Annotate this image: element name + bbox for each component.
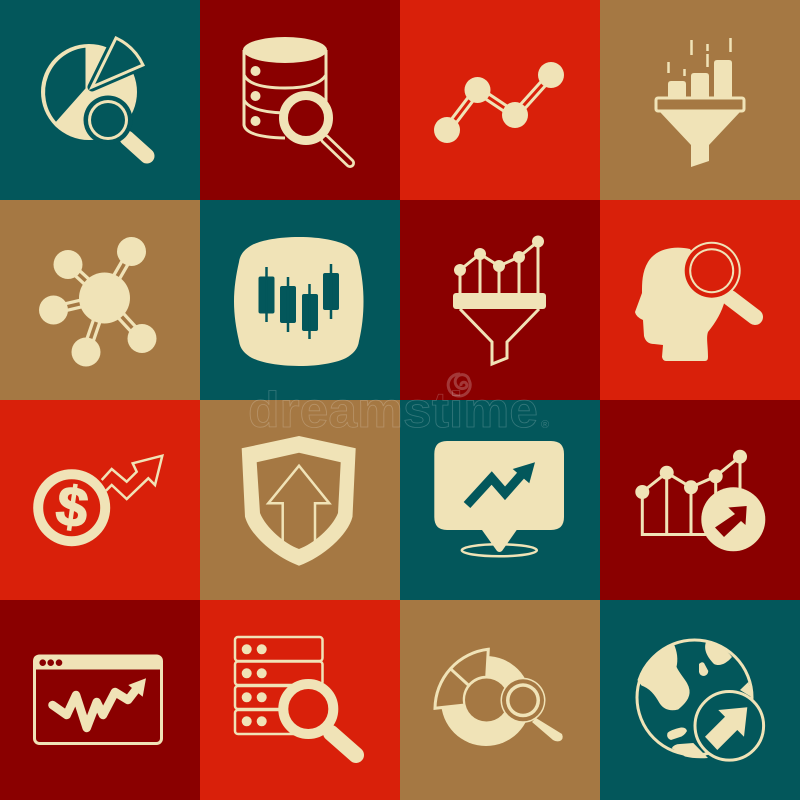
panel: donut chart search bbox=[400, 600, 600, 800]
panel: network hub bbox=[0, 200, 200, 400]
panel: globe with arrow bbox=[600, 600, 800, 800]
panel: pie chart search bbox=[0, 0, 200, 200]
panel: shield with arrow bbox=[200, 400, 400, 600]
panel: database search bbox=[200, 0, 400, 200]
panel: head analysis bbox=[600, 200, 800, 400]
panel: candlestick chart bbox=[200, 200, 400, 400]
panel: chart funnel bbox=[400, 200, 600, 400]
panel: server search bbox=[200, 600, 400, 800]
watermark text: ® bbox=[541, 419, 549, 431]
panel: line graph bbox=[400, 0, 600, 200]
panel: data filter funnel bbox=[600, 0, 800, 200]
panel: graph with arrow badge bbox=[600, 400, 800, 600]
panel: dollar growth: $ bbox=[52, 473, 92, 540]
panel: browser trend bbox=[0, 600, 200, 800]
watermark text: dreamstime bbox=[248, 382, 538, 438]
panel: trend speech bubble bbox=[400, 400, 600, 600]
panel: dollar growth bbox=[0, 400, 200, 600]
